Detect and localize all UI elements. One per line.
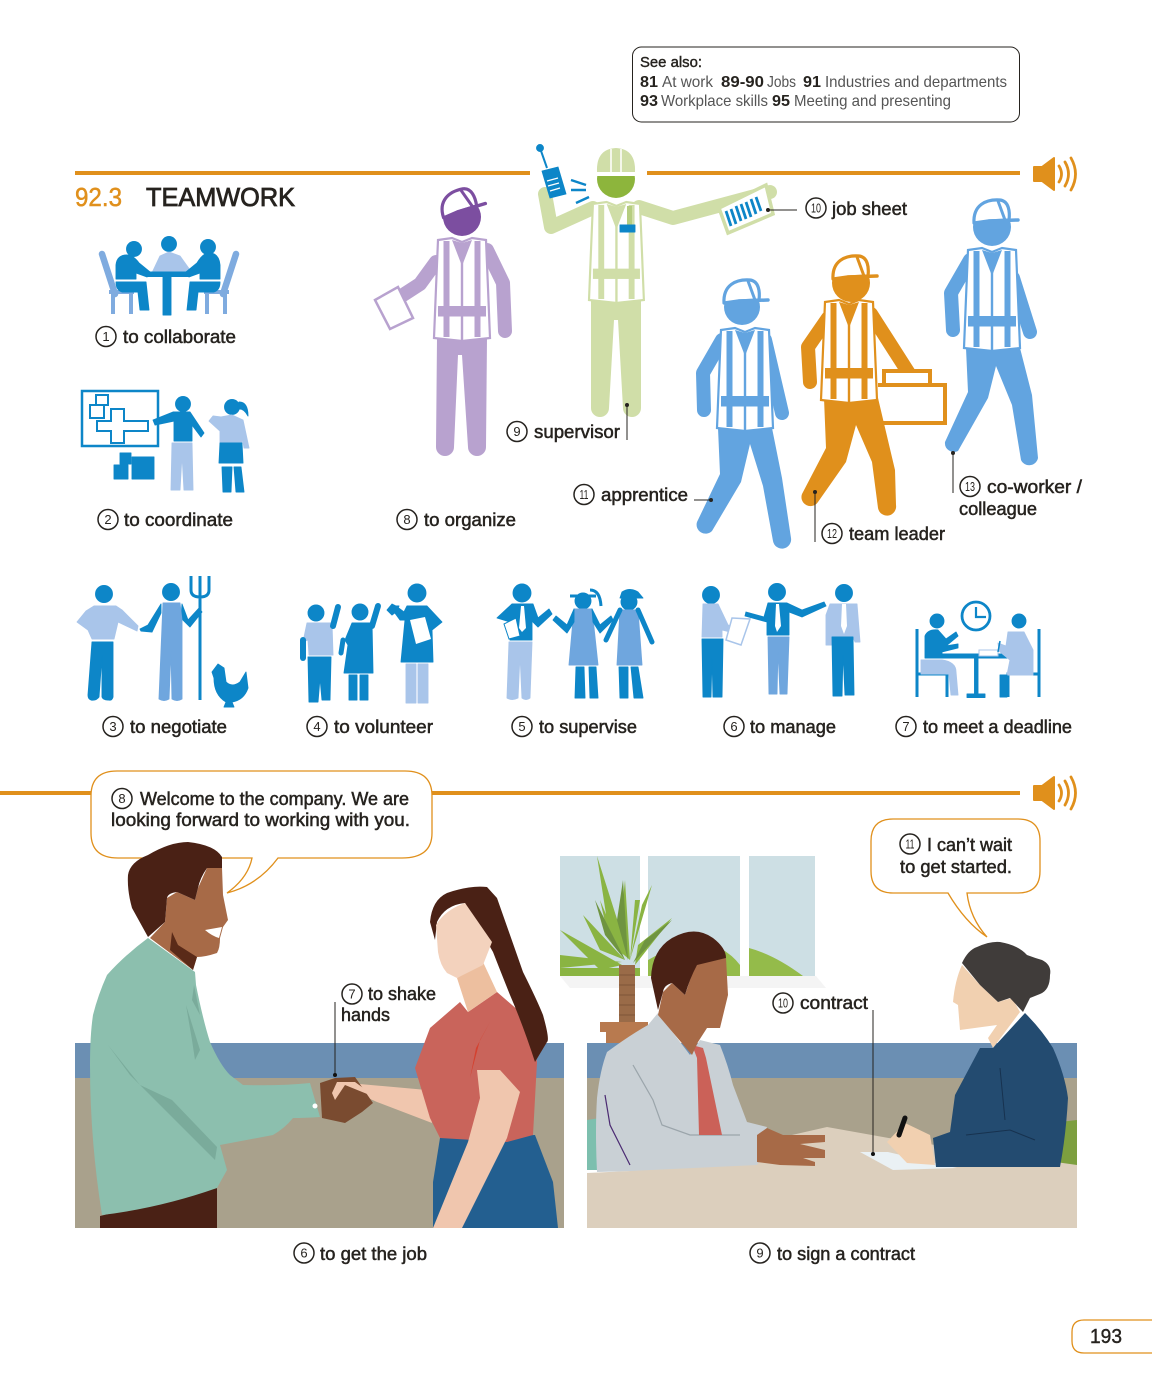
icon: to volunteer	[303, 584, 442, 703]
label: to manage: 6	[730, 719, 738, 734]
label: to collaborate: 1	[102, 329, 110, 344]
label: apprentice: apprentice	[601, 485, 688, 505]
label: job sheet: job sheet	[831, 199, 907, 219]
speech bubble: welcome: Welcome to the company. We are	[140, 789, 409, 809]
label: to shake hands: 7	[348, 986, 356, 1002]
label: co-worker / colleague: 13	[965, 479, 975, 494]
label: contract: contract	[800, 993, 868, 1013]
label: to organize: 8	[403, 512, 411, 527]
see also box: 95	[772, 93, 790, 110]
label: to shake hands	[333, 984, 436, 1077]
label: to volunteer: to volunteer	[334, 717, 433, 737]
icon: audio speaker top	[1034, 158, 1076, 190]
see also box: 89-90	[721, 74, 764, 91]
label: apprentice: 11	[580, 487, 588, 502]
page number: 193	[1090, 1326, 1122, 1348]
page number	[1072, 1320, 1152, 1353]
icon: to collaborate	[102, 236, 236, 315]
label: contract	[773, 993, 875, 1156]
see also box: See also:	[640, 54, 702, 71]
icon: to supervise	[497, 584, 652, 700]
icon: to meet a deadline	[917, 602, 1039, 698]
speech bubble: I can't wait: 11	[906, 836, 914, 852]
label: co-worker / colleague: colleague	[959, 499, 1037, 519]
label: to organize: to organize	[424, 510, 516, 530]
label: to collaborate: to collaborate	[123, 327, 236, 347]
figure: co-worker blue worker	[945, 200, 1038, 465]
label: apprentice	[574, 484, 713, 505]
person: man in grey shirt	[596, 932, 767, 1172]
see also box	[632, 47, 1020, 122]
label: to meet a deadline: 7	[902, 719, 910, 734]
label: to supervise: to supervise	[539, 717, 637, 737]
scene: shaking hands background	[75, 1043, 564, 1228]
label: supervisor: supervisor	[534, 422, 620, 442]
label: contract: 10	[778, 996, 788, 1010]
label: team leader	[813, 490, 945, 544]
label: supervisor	[507, 403, 629, 442]
icon: to negotiate	[77, 576, 248, 707]
label: to meet a deadline: to meet a deadline	[923, 717, 1072, 737]
see also box: Meeting and presenting	[794, 93, 951, 110]
label: to coordinate: to coordinate	[124, 510, 233, 530]
speech bubble: I can't wait	[871, 819, 1040, 937]
person: man's hand	[757, 1128, 825, 1166]
person: woman in navy jacket	[887, 942, 1068, 1167]
speech bubble: welcome: 8	[118, 791, 126, 806]
see also box: At work	[662, 74, 714, 91]
label: to shake hands: hands	[341, 1005, 390, 1025]
label: to shake hands: to shake	[368, 984, 436, 1004]
person: man in green shirt	[90, 842, 320, 1228]
figure: team leader orange worker	[801, 256, 945, 516]
see also box: Industries and departments	[825, 74, 1007, 91]
speech bubble: I can't wait: I can’t wait	[927, 835, 1012, 855]
label: co-worker / colleague: co-worker /	[987, 477, 1082, 497]
speech bubble: welcome: looking forward to working with you.	[111, 810, 410, 830]
label: team leader: 12	[827, 526, 837, 541]
caption: to sign a contract: to sign a contract	[777, 1244, 915, 1264]
see also box: 93	[640, 93, 658, 110]
caption: to sign a contract: 9	[756, 1246, 764, 1260]
label: to volunteer: 4	[313, 719, 321, 734]
section number: 92.3	[75, 182, 122, 212]
label: co-worker / colleague	[951, 451, 1082, 519]
label: to coordinate: 2	[104, 512, 112, 527]
figure: supervisor green worker	[536, 144, 773, 417]
see also box: Jobs	[767, 74, 796, 91]
caption: to get the job: 6	[300, 1246, 308, 1260]
label: job sheet	[766, 198, 907, 219]
scene: office window with plant	[560, 856, 826, 1056]
icon: audio speaker bottom	[1034, 777, 1076, 809]
see also box: Workplace skills	[661, 93, 768, 110]
contract paper	[860, 1152, 957, 1170]
label: supervisor: 9	[513, 424, 521, 439]
icon: to manage	[702, 584, 860, 697]
label: team leader: team leader	[849, 524, 945, 544]
see also box: 81	[640, 74, 658, 91]
heading: teamwork: TEAMWORK	[146, 182, 296, 212]
label: job sheet: 10	[811, 200, 821, 216]
figure: to organize purple worker	[375, 184, 505, 456]
label: to negotiate: to negotiate	[130, 717, 227, 737]
speech bubble: welcome	[91, 771, 432, 893]
see also box: 91	[803, 74, 821, 91]
label: to supervise: 5	[518, 719, 526, 734]
caption: to get the job: to get the job	[320, 1244, 427, 1264]
label: to negotiate: 3	[109, 719, 117, 734]
figure: apprentice blue worker	[697, 280, 791, 549]
scene: contract signing background	[587, 1043, 1077, 1170]
icon: to coordinate	[82, 391, 249, 492]
speech bubble: I can't wait: to get started.	[900, 857, 1012, 877]
label: to manage: to manage	[750, 717, 836, 737]
person: woman in red top	[320, 887, 558, 1228]
desk	[587, 1127, 1077, 1228]
